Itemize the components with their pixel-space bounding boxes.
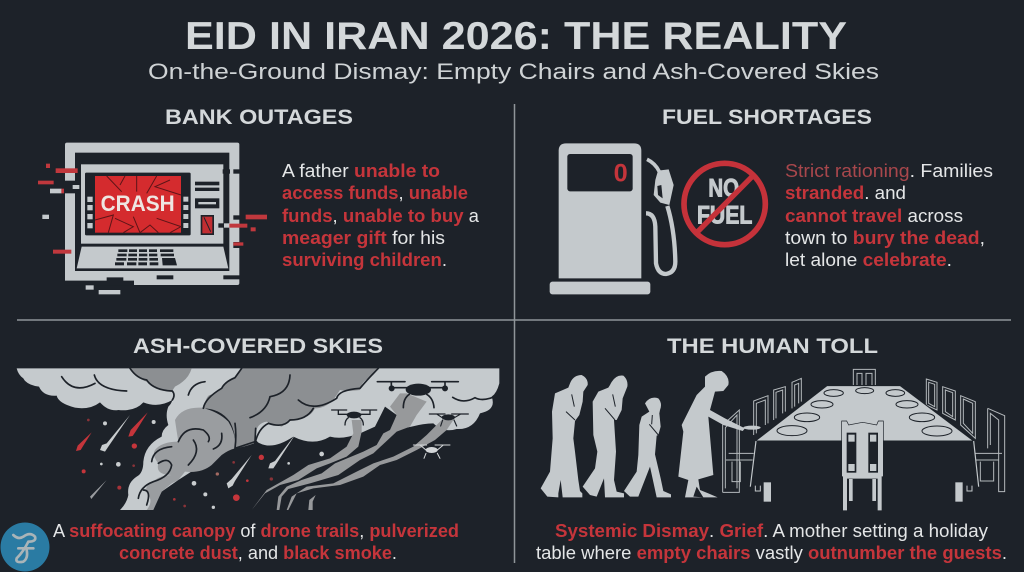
- icon: empty head chair: [842, 421, 883, 511]
- icon: empty fuel pump: [550, 143, 675, 294]
- text: bank outages: [282, 161, 480, 270]
- illustration: drone trails: [252, 393, 453, 510]
- icon: crashed ATM: [38, 143, 267, 294]
- icon: empty fuel pump: 0: [614, 160, 628, 188]
- illustration: long table with plates: [750, 386, 979, 502]
- text: bank outages: surviving children .: [282, 250, 447, 270]
- text: fuel shortages: stranded. and: [785, 183, 906, 203]
- icon: mother setting table: [678, 371, 745, 497]
- text: the human toll: Systemic Dismay . Grief. A mother setting a holiday: [555, 521, 988, 541]
- icon: child silhouette: [624, 398, 671, 497]
- text: ash-covered skies: A suffocating canopy of drone trails, pulverized: [53, 521, 459, 541]
- text: bank outages: meager gift for his: [282, 228, 445, 248]
- icon: mother silhouette: [583, 376, 627, 497]
- panel: the human toll: [536, 335, 1007, 563]
- illustration: falling embers and debris: [76, 412, 324, 509]
- text: fuel shortages: [785, 161, 993, 270]
- panel: fuel shortages: [550, 106, 993, 294]
- panel: ash-covered skies: [0, 335, 499, 572]
- heading: ash-covered skies: ASH-COVERED SKIES: [133, 335, 383, 358]
- icon: crashed ATM: CRASH: [101, 191, 175, 216]
- icon: no fuel sign: FUEL: [697, 202, 752, 230]
- text: fuel shortages: cannot travel across: [785, 206, 963, 226]
- icon: no fuel sign: NO: [708, 175, 739, 203]
- text: fuel shortages: town to bury the dead ,: [785, 228, 985, 248]
- heading: the human toll: THE HUMAN TOLL: [667, 335, 878, 358]
- heading: bank outages: BANK OUTAGES: [165, 106, 353, 129]
- panel: bank outages: [38, 106, 480, 294]
- icon: logo badge: [0, 522, 50, 572]
- text: ash-covered skies: [53, 521, 459, 563]
- text: fuel shortages: Strict rationing . Families: [785, 161, 993, 181]
- text: ash-covered skies: concrete dust, and black smoke.: [119, 543, 397, 563]
- text: the human toll: [536, 521, 1007, 563]
- heading: fuel shortages: FUEL SHORTAGES: [662, 106, 872, 129]
- text: bank outages: funds, unable to buy a: [282, 206, 480, 226]
- icon: father silhouette: [541, 375, 588, 497]
- text: fuel shortages: let alone celebrate .: [785, 250, 952, 270]
- illustration: grieving family silhouettes: [541, 371, 761, 497]
- icon: drones: [332, 382, 468, 458]
- icon: no fuel sign: [684, 163, 765, 245]
- subtitle: On-the-Ground Dismay: Empty Chairs and Ash-Covered Skies: [148, 59, 879, 84]
- text: bank outages: access funds, unable: [282, 183, 468, 203]
- illustration: side and head chairs: [723, 369, 1005, 492]
- illustration: smoke clouds: [17, 368, 499, 510]
- text: bank outages: A father unable to: [282, 161, 440, 181]
- title: EID IN IRAN 2026: THE REALITY: [185, 15, 847, 58]
- text: the human toll: table where empty chairs vastly outnumber the guests .: [536, 543, 1007, 563]
